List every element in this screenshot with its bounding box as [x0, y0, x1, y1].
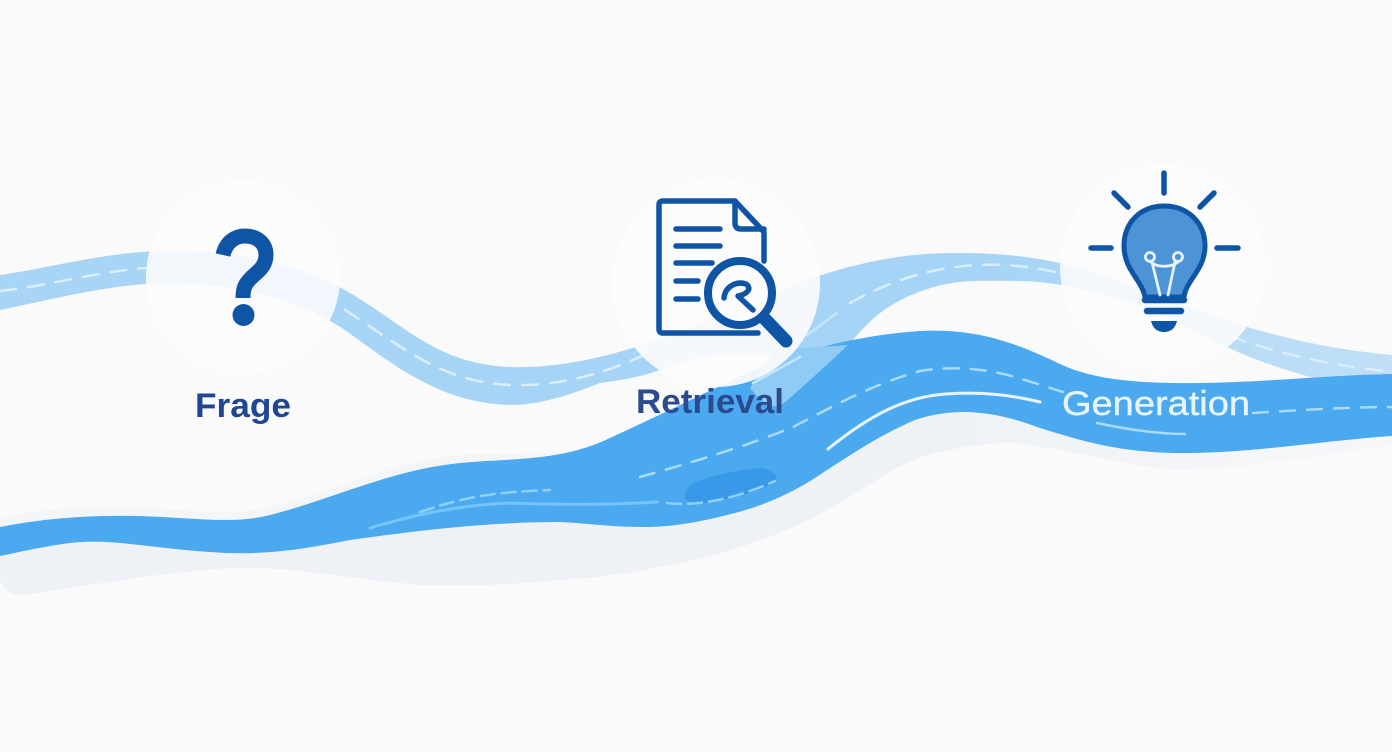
- main blue stream: [0, 331, 1392, 556]
- icon: question mark: [223, 236, 266, 326]
- label: Generation: Generation: [1062, 385, 1250, 423]
- label: Retrieval: Retrieval: [636, 383, 784, 421]
- circle: Frage node: [146, 180, 340, 374]
- stream highlight lines: [828, 393, 1040, 449]
- icon: document with magnifier: [659, 201, 786, 341]
- label: Frage: Frage: [195, 387, 291, 425]
- circle: Retrieval node: [612, 179, 820, 387]
- stream dashes: [640, 368, 1392, 477]
- circle: Generation node: [1060, 164, 1266, 370]
- ground shadow under main stream: [0, 400, 1392, 595]
- translucent band wedge crossing main stream: [750, 313, 848, 406]
- darker patch on stream: [685, 468, 777, 504]
- icon: light bulb: [1091, 173, 1238, 332]
- band centre dashes: [0, 265, 1392, 385]
- upper light-blue flow band: [0, 251, 1392, 405]
